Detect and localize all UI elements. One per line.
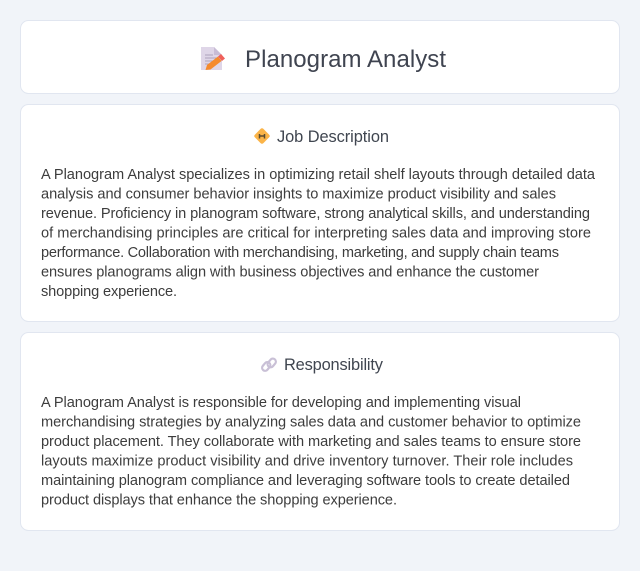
text block: responsibility: product displays that enhance the shopping experience. [41,492,397,508]
heading: Responsibility: Responsibility [284,356,384,374]
text block: responsibility [41,395,581,508]
text block: job description: revenue. Proficiency in planogram software, strong analytical skills, and understanding [41,206,590,222]
text block: responsibility: maintaining planogram compliance and leveraging software tools to create detailed [41,473,570,489]
text block: responsibility: layouts maximize product visibility and drive inventory turnover. Their role includes [41,454,573,470]
text block: responsibility: product placement. They collaborate with marketing and sales teams to ensure store [41,434,581,450]
text block: job description [41,167,596,300]
panel: title [20,20,620,94]
text block: job description: of merchandising principles are critical for interpreting sales data and improving store [41,226,591,242]
heading: Planogram Analyst: Planogram Analyst [245,46,446,73]
panel: responsibility [20,332,620,530]
text block: job description: shopping experience. [41,284,177,300]
text block: job description: ensures planograms align with business objectives and enhance the customer [41,264,539,280]
text block: job description: A Planogram Analyst specializes in optimizing retail shelf layouts through detailed data [41,167,596,183]
icon: chain link [261,357,277,372]
heading: Job Description: Job Description [277,128,389,146]
text block: responsibility: merchandising strategies by analyzing sales data and customer behavior to optimize [41,414,581,430]
icon: orange diamond sign [254,128,270,144]
text block: job description: analysis and consumer behavior insights to maximize product visibility and sales [41,186,556,202]
text block: responsibility: A Planogram Analyst is responsible for developing and implementing visual [41,395,521,411]
icon: document with pencil [201,47,225,70]
text block: job description: performance. Collaboration with merchandising, marketing, and supply chain teams [41,245,559,261]
panel: job description [20,104,620,322]
